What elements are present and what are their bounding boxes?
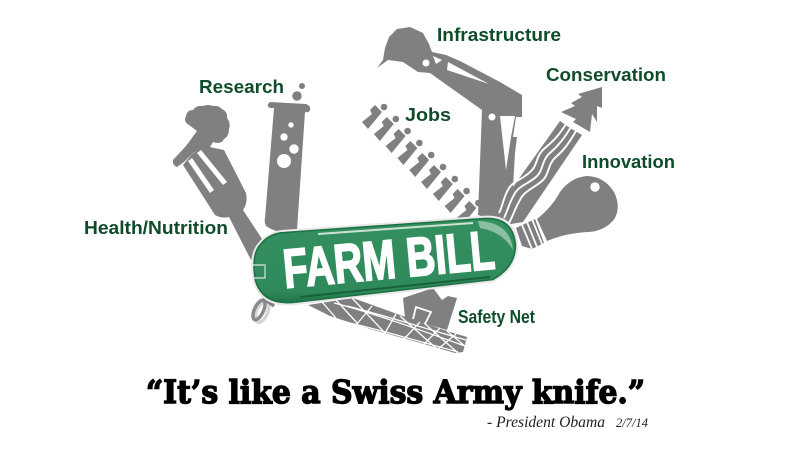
label: Health/Nutrition: Health/Nutrition xyxy=(84,217,228,238)
label: Safety Net: Safety Net xyxy=(458,306,535,327)
glossy corner xyxy=(478,221,513,250)
pill title: FARM BILL xyxy=(280,219,497,300)
small clasp xyxy=(253,265,265,278)
knife body: Farm Bill pill xyxy=(252,217,517,304)
attribution: - President Obama xyxy=(487,414,605,431)
date: 2/7/14 xyxy=(616,416,648,430)
tool: test tube with bubbles xyxy=(265,83,310,232)
tool: light bulb xyxy=(516,176,618,249)
tool: safety net with house xyxy=(308,288,467,353)
tool: fork with broccoli xyxy=(173,105,264,260)
label: Infrastructure: Infrastructure xyxy=(437,24,561,45)
label: Research: Research xyxy=(199,76,284,97)
quote: “It’s like a Swiss Army knife.” xyxy=(146,373,645,411)
tool: excavator arm xyxy=(377,27,522,222)
key ring xyxy=(250,298,274,324)
tool: row of job figures xyxy=(362,104,482,225)
highlight stripe xyxy=(318,223,473,234)
label: Conservation: Conservation xyxy=(546,64,666,85)
label: Jobs: Jobs xyxy=(405,104,451,125)
tool: tree with winding river xyxy=(495,87,602,225)
lower shade stripe xyxy=(300,277,490,297)
label: Innovation: Innovation xyxy=(582,151,675,172)
